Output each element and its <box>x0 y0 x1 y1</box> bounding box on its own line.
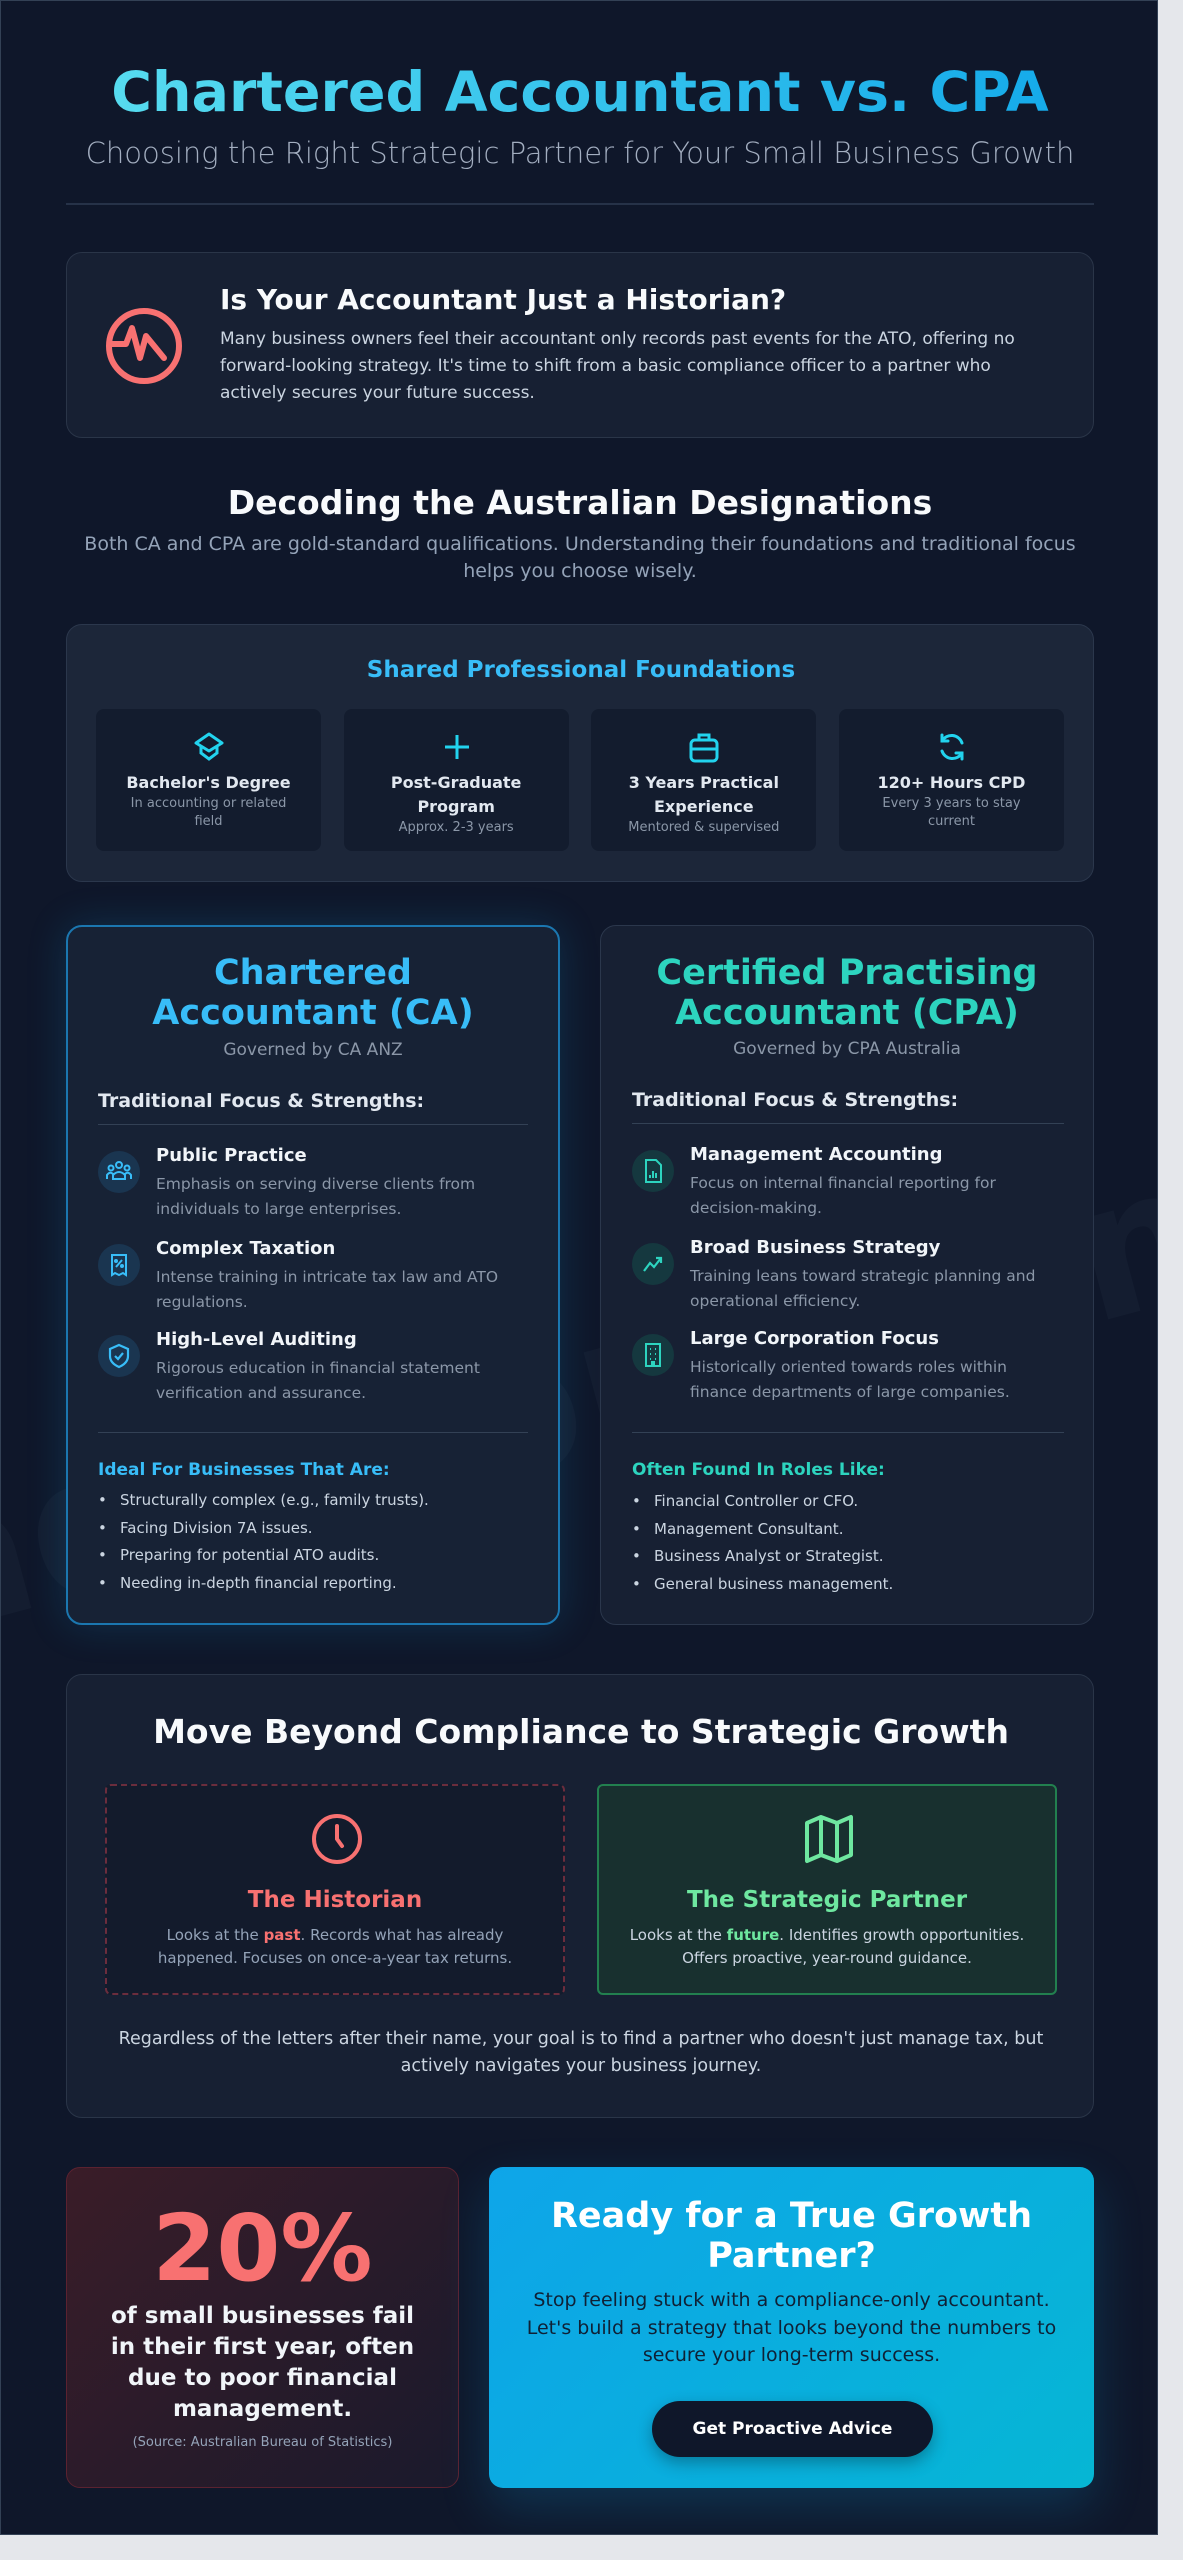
tile: postgrad: Approx. 2-3 years <box>399 820 514 835</box>
tile: cpd: Every 3 years to stay <box>882 796 1021 811</box>
panel: CA: Emphasis on serving diverse clients from individuals to large enterprises. <box>156 1175 475 1218</box>
icon: clock <box>312 1814 362 1864</box>
heading: Shared Professional Foundations <box>367 657 795 683</box>
tile: postgrad: Program <box>417 797 495 816</box>
box: historian: happened. Focuses on once-a-year tax returns. <box>158 1949 512 1967</box>
text: forward-looking strategy. It's time to shift from a basic compliance officer to a partner who <box>220 356 991 376</box>
list: Business Analyst or Strategist. <box>654 1547 884 1565</box>
heading <box>152 953 474 1033</box>
panel: strategic growth <box>66 1674 1094 2118</box>
panel: CA: Rigorous education in financial statement verification and assurance. <box>156 1359 480 1402</box>
panel: CPA <box>600 925 1094 1625</box>
item: public practice <box>98 1145 475 1218</box>
panel: CA: Complex Taxation <box>156 1238 335 1259</box>
text <box>527 2289 1056 2366</box>
text: actively secures your future success. <box>220 383 535 403</box>
item: taxation <box>98 1238 498 1310</box>
heading: Chartered <box>214 953 412 993</box>
tile: cpd: 120+ Hours CPD <box>878 773 1025 792</box>
panel: CPA: Management Accounting <box>690 1144 943 1165</box>
heading: decoding: Decoding the Australian Designations <box>228 483 932 522</box>
text: closing: Regardless of the letters after their name, your goal is to find a partner who doesn't just manage tax, but actively navigates your business journey. <box>119 2029 1043 2076</box>
tile: experience: Mentored & supervised <box>628 820 779 835</box>
item: management accounting <box>632 1144 996 1216</box>
box: strategic partner: The Strategic Partner <box>687 1887 967 1913</box>
text <box>220 329 1015 403</box>
list: Financial Controller or CFO. <box>654 1492 858 1510</box>
list: Management Consultant. <box>654 1520 843 1538</box>
source: (Source: Australian Bureau of Statistics) <box>133 2435 392 2450</box>
tile: experience <box>591 709 816 851</box>
icon: warning pulse <box>106 308 182 384</box>
tile: postgrad <box>344 709 569 851</box>
subheading: Governed by CA ANZ <box>223 1040 403 1060</box>
list <box>634 1492 893 1592</box>
heading <box>656 953 1038 1033</box>
box: historian <box>105 1784 565 1995</box>
tiles row <box>96 709 1064 851</box>
stat text: of small businesses fail <box>111 2303 414 2329</box>
tile: cpd <box>839 709 1064 851</box>
text: Let's build a strategy that looks beyond the numbers to <box>527 2316 1056 2338</box>
list heading: Often Found In Roles Like: <box>632 1460 885 1480</box>
subheading: Governed by CPA Australia <box>733 1039 961 1059</box>
subtitle: Choosing the Right Strategic Partner for Your Small Business Growth <box>86 136 1074 170</box>
heading: Certified Practising <box>656 953 1038 993</box>
panel: historian intro <box>66 252 1094 438</box>
box: historian: Looks at the past. Records what has already <box>167 1926 503 1944</box>
focus heading: Traditional Focus & Strengths: <box>98 1090 424 1112</box>
item: auditing <box>98 1329 480 1402</box>
panel: CPA: Broad Business Strategy <box>690 1237 940 1258</box>
tile: bachelor: Bachelor's Degree <box>126 773 291 792</box>
panel: CTA <box>489 2167 1094 2488</box>
heading: Accountant (CA) <box>152 993 474 1033</box>
heading: Is Your Accountant Just a Historian? <box>220 283 786 316</box>
panel: CPA: Historically oriented towards roles within finance departments of large companies. <box>690 1358 1010 1400</box>
stat text <box>111 2303 414 2422</box>
box: strategic partner: Offers proactive, year-round guidance. <box>682 1949 972 1967</box>
list: Preparing for potential ATO audits. <box>120 1546 379 1564</box>
button <box>652 2401 933 2457</box>
stat text: due to poor financial <box>128 2365 397 2391</box>
stat text: in their first year, often <box>111 2334 414 2360</box>
box: historian: The Historian <box>248 1887 422 1913</box>
text: Stop feeling stuck with a compliance-only accountant. <box>533 2289 1050 2311</box>
heading: Ready for a True Growth <box>551 2196 1032 2236</box>
button: Get Proactive Advice <box>693 2419 892 2439</box>
panel: stat <box>66 2167 459 2488</box>
title: Chartered Accountant vs. CPA <box>111 60 1049 125</box>
item: strategy <box>632 1237 1035 1310</box>
panel: CA: High-Level Auditing <box>156 1329 357 1350</box>
panel: CA: Intense training in intricate tax law and ATO regulations. <box>156 1268 498 1310</box>
tile: postgrad: Post-Graduate <box>391 773 521 792</box>
tile: experience: Experience <box>654 797 754 816</box>
tile: experience: 3 Years Practical <box>629 773 779 792</box>
box: strategic partner: Looks at the future. Identifies growth opportunities. <box>630 1926 1024 1944</box>
panel: CA <box>66 925 560 1625</box>
list: Structurally complex (e.g., family trusts). <box>120 1491 429 1509</box>
heading: Accountant (CPA) <box>675 993 1019 1033</box>
stat text: management. <box>173 2396 352 2422</box>
text: Many business owners feel their accountant only records past events for the ATO, offering no <box>220 329 1015 349</box>
text: secure your long-term success. <box>643 2344 940 2366</box>
tile: bachelor: In accounting or related <box>131 796 286 811</box>
panel: CPA: Training leans toward strategic planning and operational efficiency. <box>690 1267 1035 1310</box>
list: General business management. <box>654 1574 893 1592</box>
heading: Move Beyond Compliance to Strategic Growth <box>153 1712 1009 1751</box>
box: strategic partner <box>597 1784 1057 1995</box>
tile: cpd: current <box>928 814 975 829</box>
text: decoding sub: Both CA and CPA are gold-standard qualifications. Understanding their foundations and traditional focus helps you choose wisely. <box>84 533 1076 582</box>
panel: CA: Public Practice <box>156 1145 307 1166</box>
heading: Partner? <box>707 2236 876 2276</box>
tile: bachelor <box>96 709 321 851</box>
list heading: Ideal For Businesses That Are: <box>98 1460 390 1480</box>
item: corporation <box>632 1328 1010 1400</box>
tile: bachelor: field <box>194 814 223 829</box>
panel: CPA: Large Corporation Focus <box>690 1328 939 1349</box>
list <box>100 1491 429 1592</box>
list: Facing Division 7A issues. <box>120 1518 313 1536</box>
panel: shared foundations <box>66 624 1094 882</box>
list: Needing in-depth financial reporting. <box>120 1574 397 1592</box>
focus heading: Traditional Focus & Strengths: <box>632 1089 958 1111</box>
heading <box>551 2196 1032 2276</box>
panel: CPA: Focus on internal financial reporting for decision-making. <box>690 1174 996 1216</box>
icon: map <box>805 1814 853 1864</box>
stat number: 20% <box>152 2195 373 2302</box>
